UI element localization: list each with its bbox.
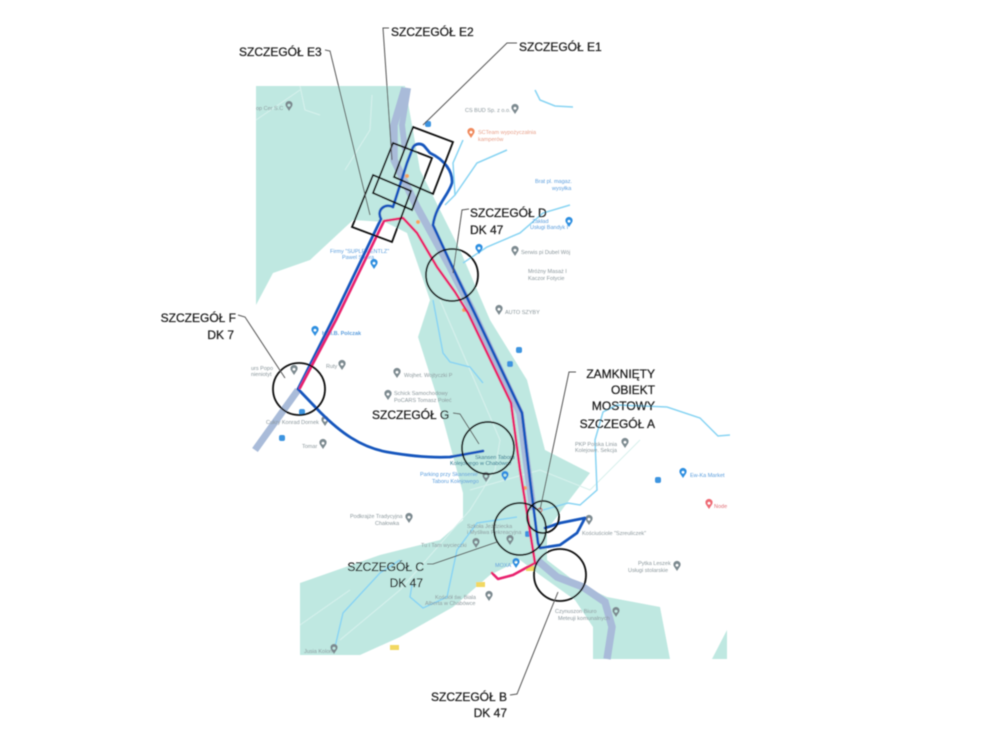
detail circle F (273, 363, 325, 415)
POI pins and labels: Pawel Sikora (342, 255, 375, 261)
POI pins and labels: Szkoła Jeździecka (467, 524, 513, 530)
label: closed bridge, detail A: MOSTOWY (592, 399, 655, 413)
POI pins and labels: Schick Samochodowy (394, 391, 448, 397)
POI pins and labels: Pytka Leszek (638, 561, 671, 567)
POI pins and labels (251, 101, 727, 655)
POI pins and labels: Czynuszon Biuro (555, 609, 597, 615)
white roads over green (256, 86, 640, 640)
label: closed bridge, detail A: SZCZEGÓŁ A (580, 416, 655, 431)
detail circle A (527, 501, 559, 533)
POI pins and labels: Kolejowe. Sekcja (575, 448, 618, 454)
POI pins and labels: AUTO SZYBY (505, 310, 540, 316)
POI pins and labels: Usługi stolarskie (628, 568, 668, 574)
label: detail B: DK 47 (474, 706, 507, 720)
POI pins and labels: Kolejowego w Chabówce (450, 461, 511, 467)
POI pins and labels: PoCARS Tomasz Połeć (394, 398, 452, 404)
route: blue line (298, 144, 585, 548)
label: closed bridge, detail A: OBIEKT (611, 383, 656, 397)
map background: green areas (256, 86, 727, 659)
label: detail D: SZCZEGÓŁ D (470, 206, 547, 220)
route: pink line (300, 218, 535, 579)
label: detail C: DK 47 (390, 576, 423, 590)
detail rectangle E1 (394, 127, 453, 194)
POI pins and labels: Chałowka (375, 521, 400, 527)
POI pins and labels: H.M.B. Polczak (322, 331, 362, 337)
POI pins and labels: Zakład (532, 219, 549, 225)
POI pins and labels: Podkrajże Tradycyjna (350, 514, 404, 520)
rivers (335, 90, 730, 647)
POI pins and labels: kamperów (478, 137, 503, 143)
POI pins and labels: Serwis pi Dubel Wój (521, 250, 570, 256)
POI pins and labels: Tu i Tam wycieczki (421, 543, 467, 549)
POI pins and labels: Alberta w Chabówce (425, 601, 475, 607)
POI pins and labels: Tomar (302, 444, 317, 450)
POI pins and labels: Firmy "SUPLEMENTLZ" (330, 249, 389, 255)
detail circle G (462, 422, 514, 474)
POI pins and labels: Cukry Konrad Dornek (266, 420, 319, 426)
label: detail D: DK 47 (470, 223, 504, 237)
POI pins and labels: urs Popo (251, 366, 273, 372)
label: detail F: SZCZEGÓŁ F (161, 311, 236, 325)
POI pins and labels: CS BUD Sp. z o.o. (465, 108, 511, 114)
label: closed bridge, detail A: ZAMKNIĘTY (586, 367, 655, 381)
POI pins and labels: i Myśliwa Rekreacyjna (467, 530, 522, 536)
POI pins and labels: Skansen Taboru (475, 455, 515, 461)
POI pins and labels: SCTeam wypożyczalnia (478, 130, 537, 136)
POI pins and labels: Brat pl. magaz. (535, 179, 572, 185)
label: detail E2: SZCZEGÓŁ E2 (391, 24, 474, 39)
label: detail F: DK 7 (207, 328, 234, 342)
label: detail E1: SZCZEGÓŁ E1 (519, 39, 602, 54)
POI pins and labels: nieniotyt (251, 372, 272, 378)
detail circle D (426, 249, 478, 301)
label: detail G: SZCZEGÓŁ G (372, 407, 449, 422)
POI pins and labels: Meteuji komunalnych (558, 616, 610, 622)
POI pins and labels: Wojhet. Wojtyczki P (404, 373, 453, 379)
leader lines (238, 28, 576, 695)
label: detail C: SZCZEGÓŁ C (347, 560, 424, 574)
POI pins and labels: Mróżny Masaż I (528, 269, 567, 275)
POI pins and labels: Taboru Kolejowego (432, 479, 479, 485)
POI pins and labels: Ruty (326, 364, 338, 370)
POI pins and labels: Ew-Ka Market (690, 473, 725, 479)
POI pins and labels: wysyłka (551, 186, 572, 192)
POI pins and labels: Kościół św. Biala (435, 595, 477, 601)
detail rectangle E2 (373, 143, 432, 210)
POI pins and labels: Node (714, 504, 727, 510)
POI pins and labels: Kaczor Fotycie (528, 276, 564, 282)
POI pins and labels: Jusia Kolon (304, 649, 332, 655)
POI pins and labels: Parking przy Skansenie (420, 472, 478, 478)
label: detail B: SZCZEGÓŁ B (431, 690, 507, 704)
detail rectangle E3 (352, 175, 411, 242)
detail circle B (534, 549, 586, 601)
POI pins and labels: Usługi Bandyk I (530, 225, 569, 231)
POI pins and labels: MOXA (495, 563, 512, 569)
POI pins and labels: Kościuściole "Szreuliczek" (582, 531, 646, 537)
highway road (255, 88, 612, 659)
label: detail E3: SZCZEGÓŁ E3 (239, 44, 322, 59)
detail circle C (494, 503, 546, 555)
POI pins and labels: PKP Polska Linia (575, 442, 618, 448)
POI pins and labels: op Cer S.C (256, 106, 283, 112)
map (161, 24, 730, 720)
